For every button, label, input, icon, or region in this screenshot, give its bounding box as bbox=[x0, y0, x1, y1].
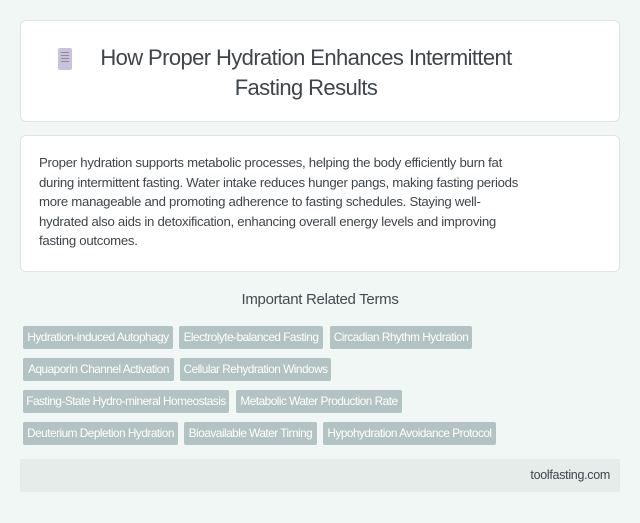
tag: Fasting-State Hydro-mineral Homeostasis bbox=[26, 394, 226, 408]
footer bbox=[20, 459, 620, 492]
tag bbox=[180, 358, 331, 381]
tag: Cellular Rehydration Windows bbox=[183, 362, 328, 376]
tag: Hydration-induced Autophagy bbox=[27, 330, 169, 344]
header card bbox=[20, 20, 620, 122]
description card bbox=[20, 135, 620, 272]
title: Fasting Results bbox=[235, 75, 377, 100]
tag bbox=[184, 422, 317, 445]
title: How Proper Hydration Enhances Intermittent bbox=[100, 45, 512, 70]
tag bbox=[23, 422, 178, 445]
description text: fasting outcomes. bbox=[39, 233, 138, 248]
tag: Deuterium Depletion Hydration bbox=[27, 426, 174, 440]
description text: during intermittent fasting. Water intake reduces hunger pangs, making fasting periods bbox=[39, 174, 518, 190]
tag bbox=[23, 326, 173, 349]
description text: Proper hydration supports metabolic processes, helping the body efficiently burn fat bbox=[39, 155, 502, 170]
tag bbox=[236, 390, 402, 413]
tag bbox=[179, 326, 323, 349]
tag bbox=[23, 390, 229, 413]
related terms heading: Important Related Terms bbox=[241, 291, 399, 308]
tag bbox=[323, 422, 496, 445]
description text: hydrated also aids in detoxification, enhancing overall energy levels and improving bbox=[39, 214, 496, 228]
footer text: toolfasting.com bbox=[530, 468, 610, 482]
title bbox=[100, 45, 512, 100]
icon: document bbox=[58, 48, 72, 70]
tag: Metabolic Water Production Rate bbox=[240, 394, 398, 408]
tag: Bioavailable Water Timing bbox=[189, 426, 312, 440]
tag: Circadian Rhythm Hydration bbox=[334, 330, 468, 344]
tag bbox=[23, 358, 174, 381]
description text: more manageable and promoting adherence to fasting schedules. Staying well- bbox=[39, 194, 481, 209]
tag: Hypohydration Avoidance Protocol bbox=[327, 426, 492, 440]
tag bbox=[330, 326, 472, 349]
tag: Aquaporin Channel Activation bbox=[28, 362, 169, 376]
description text bbox=[39, 155, 518, 248]
tag: Electrolyte-balanced Fasting bbox=[184, 330, 318, 344]
